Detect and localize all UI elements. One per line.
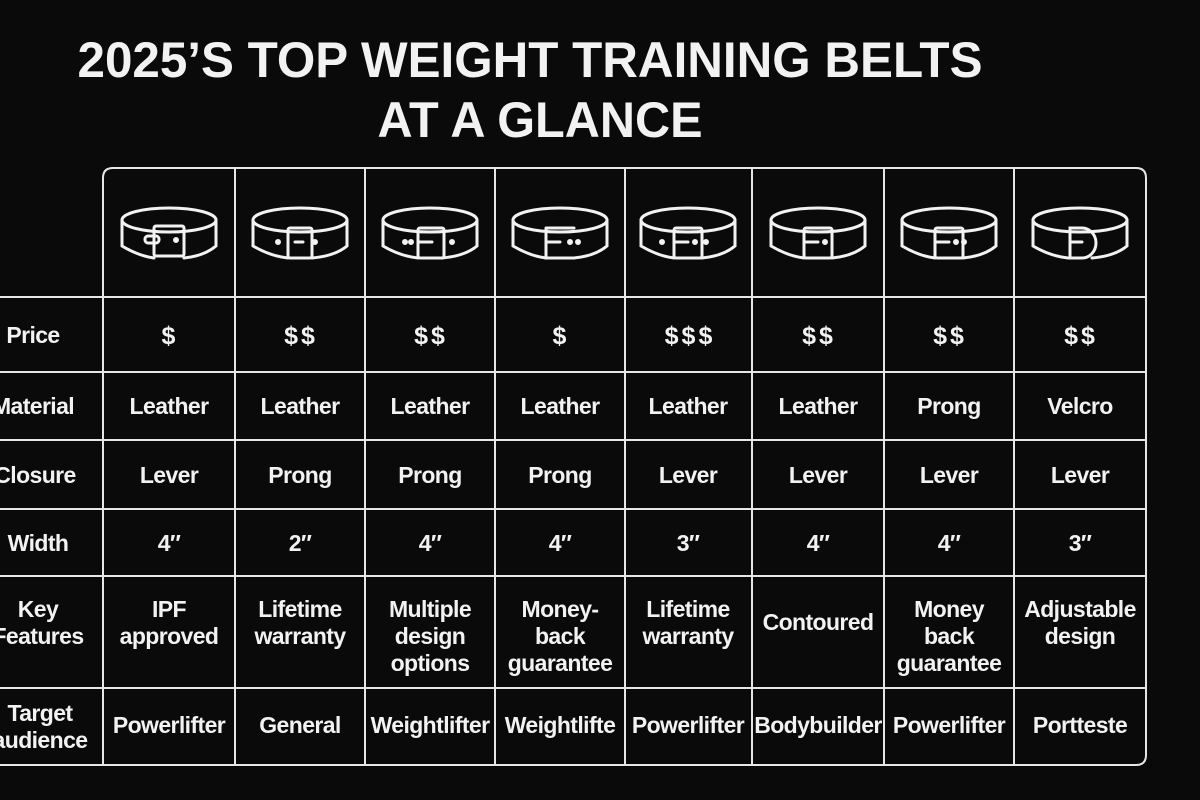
target audience row: Bodybuilder — [754, 712, 882, 738]
target audience row: Powerlifter — [632, 712, 745, 738]
material row: Leather — [649, 393, 728, 419]
key features row: guarantee — [508, 650, 612, 676]
closure row: Lever — [140, 462, 199, 488]
material row: Leather — [391, 393, 470, 419]
price row: $$ — [284, 322, 318, 350]
icon: belt 7 — [902, 208, 996, 258]
row labels: Width — [8, 530, 68, 556]
width row: 4″ — [419, 530, 442, 556]
key features row: Money- — [522, 596, 598, 622]
width row: 4″ — [938, 530, 961, 556]
key features row: design — [1045, 623, 1115, 649]
material row: Velcro — [1047, 393, 1113, 419]
key features row: design — [395, 623, 465, 649]
key features row: Lifetime — [258, 596, 342, 622]
key features row: options — [391, 650, 469, 676]
closure row: Prong — [398, 462, 462, 488]
material row: Prong — [917, 393, 981, 419]
material row — [130, 393, 1113, 419]
price row: $$$ — [665, 322, 715, 350]
row labels: Price — [6, 322, 60, 348]
material row: Leather — [521, 393, 600, 419]
icon: belt 8 — [1033, 208, 1127, 258]
target audience row: Weightlifter — [371, 712, 490, 738]
price row: $$ — [1064, 322, 1098, 350]
width row: 3″ — [677, 530, 700, 556]
price row: $$ — [414, 322, 448, 350]
target audience row: General — [259, 712, 341, 738]
key features row: IPF — [152, 596, 187, 622]
key features row: back — [924, 623, 975, 649]
price row: $$ — [933, 322, 967, 350]
icon: belt 1 — [122, 208, 216, 258]
closure row: Prong — [528, 462, 592, 488]
key features row: back — [535, 623, 586, 649]
material row: Leather — [130, 393, 209, 419]
row labels: Key — [18, 596, 59, 622]
key features row: warranty — [253, 623, 346, 649]
price row: $ — [162, 322, 178, 350]
material row: Leather — [261, 393, 340, 419]
key features row — [120, 596, 1136, 676]
target audience row: Powerlifter — [893, 712, 1006, 738]
closure row: Lever — [920, 462, 979, 488]
target audience row: Portteste — [1033, 712, 1127, 738]
key features row: Contoured — [763, 609, 873, 635]
icon: belt 6 — [771, 208, 865, 258]
title: AT A GLANCE — [378, 92, 702, 148]
width row: 3″ — [1069, 530, 1092, 556]
key features row: Multiple — [389, 596, 471, 622]
material row: Leather — [779, 393, 858, 419]
key features row: Adjustable — [1024, 596, 1136, 622]
key features row: guarantee — [897, 650, 1001, 676]
title — [78, 32, 982, 148]
key features row: approved — [120, 623, 218, 649]
title: 2025’S TOP WEIGHT TRAINING BELTS — [78, 32, 982, 88]
closure row: Prong — [268, 462, 332, 488]
table grid — [0, 168, 1146, 765]
row labels: Target — [8, 700, 73, 726]
table data — [113, 322, 1136, 738]
width row — [158, 530, 1092, 556]
icon: belt 3 — [383, 208, 477, 258]
price row — [162, 322, 1098, 350]
price row: $$ — [802, 322, 836, 350]
closure row: Lever — [659, 462, 718, 488]
belt icons row — [122, 208, 1127, 258]
closure row: Lever — [1051, 462, 1110, 488]
width row: 4″ — [549, 530, 572, 556]
row labels — [0, 322, 87, 753]
target audience row — [113, 712, 1127, 738]
icon: belt 2 — [253, 208, 347, 258]
key features row: warranty — [641, 623, 734, 649]
width row: 4″ — [807, 530, 830, 556]
target audience row: Powerlifter — [113, 712, 226, 738]
target audience row: Weightlifte — [505, 712, 615, 738]
price row: $ — [553, 322, 569, 350]
closure row — [140, 462, 1110, 488]
key features row: Money — [914, 596, 985, 622]
width row: 4″ — [158, 530, 181, 556]
key features row: Lifetime — [646, 596, 730, 622]
width row: 2″ — [289, 530, 312, 556]
icon: belt 5 — [641, 208, 735, 258]
icon: belt 4 — [513, 208, 607, 258]
closure row: Lever — [789, 462, 848, 488]
